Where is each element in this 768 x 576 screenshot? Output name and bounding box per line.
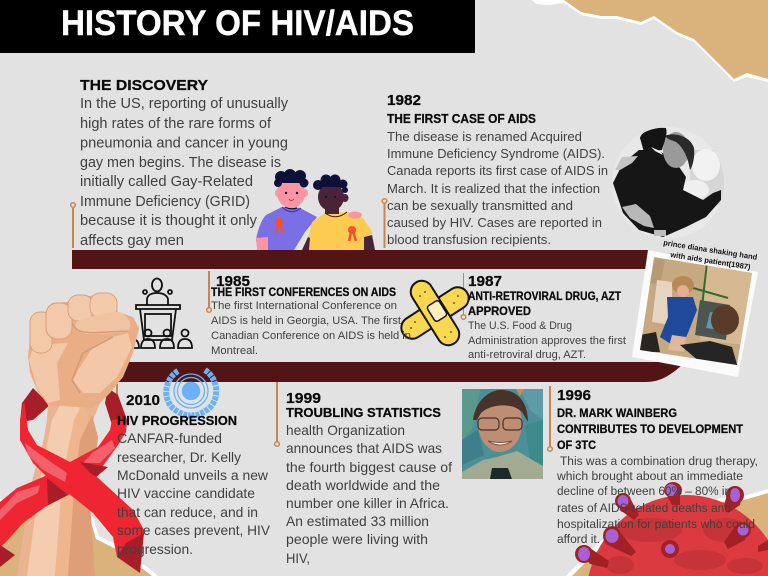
section: 1996 Dr. Mark Wainberg: DR. MARK WAINBERG bbox=[557, 406, 677, 420]
title banner: HISTORY OF HIV/AIDS bbox=[61, 4, 414, 43]
section: 1999 troubling statistics: number one killer in Africa. bbox=[286, 495, 449, 511]
ribbon: rear dark loops bbox=[20, 388, 50, 422]
section: the discovery: high rates of the rare forms of bbox=[80, 115, 272, 132]
photo: embrace, circular black and white bbox=[612, 126, 724, 240]
section: 1985 first conferences: THE FIRST CONFERENCES ON AIDS bbox=[211, 287, 396, 299]
polaroid caption: prince diana shaking hand bbox=[663, 238, 758, 262]
section: the discovery: THE DISCOVERY bbox=[80, 77, 208, 94]
section: 1982 first case of AIDS: 1982 bbox=[387, 92, 421, 109]
section: 1996 Dr. Mark Wainberg: CONTRIBUTES TO DEVELOPMENT bbox=[557, 422, 744, 436]
section: 1987 AZT approved: Administration approves the first bbox=[468, 335, 626, 347]
section: 1996 Dr. Mark Wainberg: This was a combination drug therapy, bbox=[560, 454, 758, 468]
section: the discovery bbox=[80, 77, 288, 249]
section: 1985 first conferences: Montreal. bbox=[211, 345, 258, 357]
section: 1982 first case of AIDS: THE FIRST CASE OF AIDS bbox=[387, 112, 536, 126]
section: 1999 troubling statistics: the fourth biggest cause of bbox=[286, 459, 452, 475]
section: the discovery: gay men begins. The disease is bbox=[80, 154, 281, 171]
polaroid photo: Diana with patient bbox=[640, 257, 752, 365]
section: 2010 HIV progression: that can reduce, and in bbox=[117, 505, 258, 520]
polaroid caption: with aids patient(1987) bbox=[669, 250, 752, 272]
section: 2010 HIV progression: researcher, Dr. Kelly bbox=[117, 450, 241, 465]
section: 1985 first conferences: The first International Conference on bbox=[211, 300, 397, 312]
section: the discovery: because it is thought it only bbox=[80, 212, 257, 229]
ribbon: front band running to lower right bbox=[20, 400, 144, 557]
icon: crossed bandage bbox=[397, 277, 473, 349]
section: 1996 Dr. Mark Wainberg: hospitalization for patients who could bbox=[557, 517, 755, 531]
photo: Dr. Mark Wainberg bbox=[462, 389, 543, 479]
section: 1985 first conferences: 1985 bbox=[216, 273, 250, 290]
section: 1987 AZT approved: APPROVED bbox=[468, 306, 531, 318]
section: 1987 AZT approved: 1987 bbox=[468, 273, 502, 290]
section: 1982 first case of AIDS: can be sexually transmitted and bbox=[387, 199, 573, 213]
section: 1999 troubling statistics: HIV, bbox=[286, 550, 310, 566]
section: 1999 troubling statistics: people were living with bbox=[286, 531, 428, 547]
right man shirt bbox=[302, 212, 373, 250]
section: 1999 troubling statistics bbox=[286, 390, 452, 566]
timeline band: lower bbox=[117, 362, 685, 382]
section: 1999 troubling statistics: announces that AIDS was bbox=[286, 440, 442, 456]
section: 1996 Dr. Mark Wainberg: decline of between 60% – 80% in bbox=[557, 484, 731, 498]
timeline band: upper bbox=[72, 250, 649, 269]
virus illustration bbox=[575, 482, 768, 576]
section: the discovery: affects gay men bbox=[80, 232, 184, 249]
fist bbox=[28, 293, 139, 408]
icon: speaker at podium with audience bbox=[125, 278, 192, 348]
timeline connectors bbox=[71, 199, 552, 451]
illustration: two men with red ribbons bbox=[256, 169, 375, 250]
illustration: raised fist with red ribbon bbox=[0, 293, 144, 576]
section: 1987 AZT approved: anti-retroviral drug, AZT. bbox=[468, 349, 586, 361]
section: 2010 HIV progression bbox=[117, 392, 270, 557]
section: 1999 troubling statistics: An estimated 33 million bbox=[286, 513, 429, 529]
section: 2010 HIV progression: McDonald unveils a new bbox=[117, 468, 268, 483]
section: 1996 Dr. Mark Wainberg: OF 3TC bbox=[557, 438, 596, 452]
section: 1999 troubling statistics: death worldwide and the bbox=[286, 477, 440, 493]
section: the discovery: pneumonia and cancer in young bbox=[80, 134, 288, 152]
section: 1982 first case of AIDS: caused by HIV. Cases are reported in bbox=[387, 216, 602, 230]
section: 1987 AZT approved: ANTI-RETROVIRAL DRUG, AZT bbox=[468, 291, 621, 303]
section: 1985 first conferences bbox=[211, 273, 411, 357]
torn paper: bottom left bbox=[0, 499, 158, 576]
section: 1987 AZT approved bbox=[468, 273, 626, 361]
section: 1999 troubling statistics: TROUBLING STATISTICS bbox=[286, 405, 441, 420]
section: 1987 AZT approved: The U.S. Food & Drug bbox=[468, 320, 572, 332]
section: 1982 first case of AIDS: The disease is renamed Acquired bbox=[387, 130, 582, 144]
section: 1996 Dr. Mark Wainberg: which brought about an immediate bbox=[556, 469, 743, 483]
section: 2010 HIV progression: progression. bbox=[117, 542, 193, 557]
torn paper: top right bbox=[532, 0, 768, 82]
section: 1999 troubling statistics: 1999 bbox=[286, 390, 321, 407]
section: 1985 first conferences: Canadian Conference on AIDS is held in bbox=[211, 330, 411, 342]
section: 1996 Dr. Mark Wainberg bbox=[556, 387, 758, 546]
ribbon: band running to lower left bbox=[0, 418, 126, 547]
left man shirt bbox=[256, 207, 317, 250]
section: 1996 Dr. Mark Wainberg: afford it. bbox=[557, 532, 600, 546]
section: 1982 first case of AIDS: Immune Deficiency Syndrome (AIDS). bbox=[387, 147, 605, 161]
section: 1982 first case of AIDS: March. It is realized that the infection bbox=[387, 182, 600, 196]
title banner bbox=[0, 0, 475, 53]
torn paper: bottom right bbox=[566, 489, 768, 576]
section: 1982 first case of AIDS: Canada reports its first case of AIDS in bbox=[387, 164, 608, 178]
section: 2010 HIV progression: 2010 bbox=[126, 392, 160, 409]
section: 2010 HIV progression: some cases prevent, HIV bbox=[117, 523, 270, 538]
section: the discovery: initially called Gay-Related bbox=[80, 173, 253, 190]
section: 1996 Dr. Mark Wainberg: 1996 bbox=[557, 387, 591, 404]
section: 2010 HIV progression: HIV PROGRESSION bbox=[117, 414, 237, 428]
arm bbox=[17, 403, 100, 576]
polaroid frame bbox=[632, 250, 758, 377]
section: 2010 HIV progression: HIV vaccine candidate bbox=[117, 486, 255, 501]
section: 1982 first case of AIDS bbox=[387, 92, 608, 247]
section: 1985 first conferences: AIDS is held in Georgia, USA. The first bbox=[211, 315, 401, 327]
section: the discovery: In the US, reporting of unusually bbox=[80, 95, 288, 112]
section: 1999 troubling statistics: health Organization bbox=[286, 422, 405, 438]
icon: United Nations emblem bbox=[166, 370, 216, 415]
section: the discovery: Immune Deficiency (GRID) bbox=[80, 193, 250, 210]
section: 2010 HIV progression: CANFAR-funded bbox=[117, 431, 222, 446]
section: 1982 first case of AIDS: blood transfusion recipients. bbox=[387, 233, 551, 247]
section: 1996 Dr. Mark Wainberg: rates of AIDS-related deaths and bbox=[557, 501, 731, 515]
